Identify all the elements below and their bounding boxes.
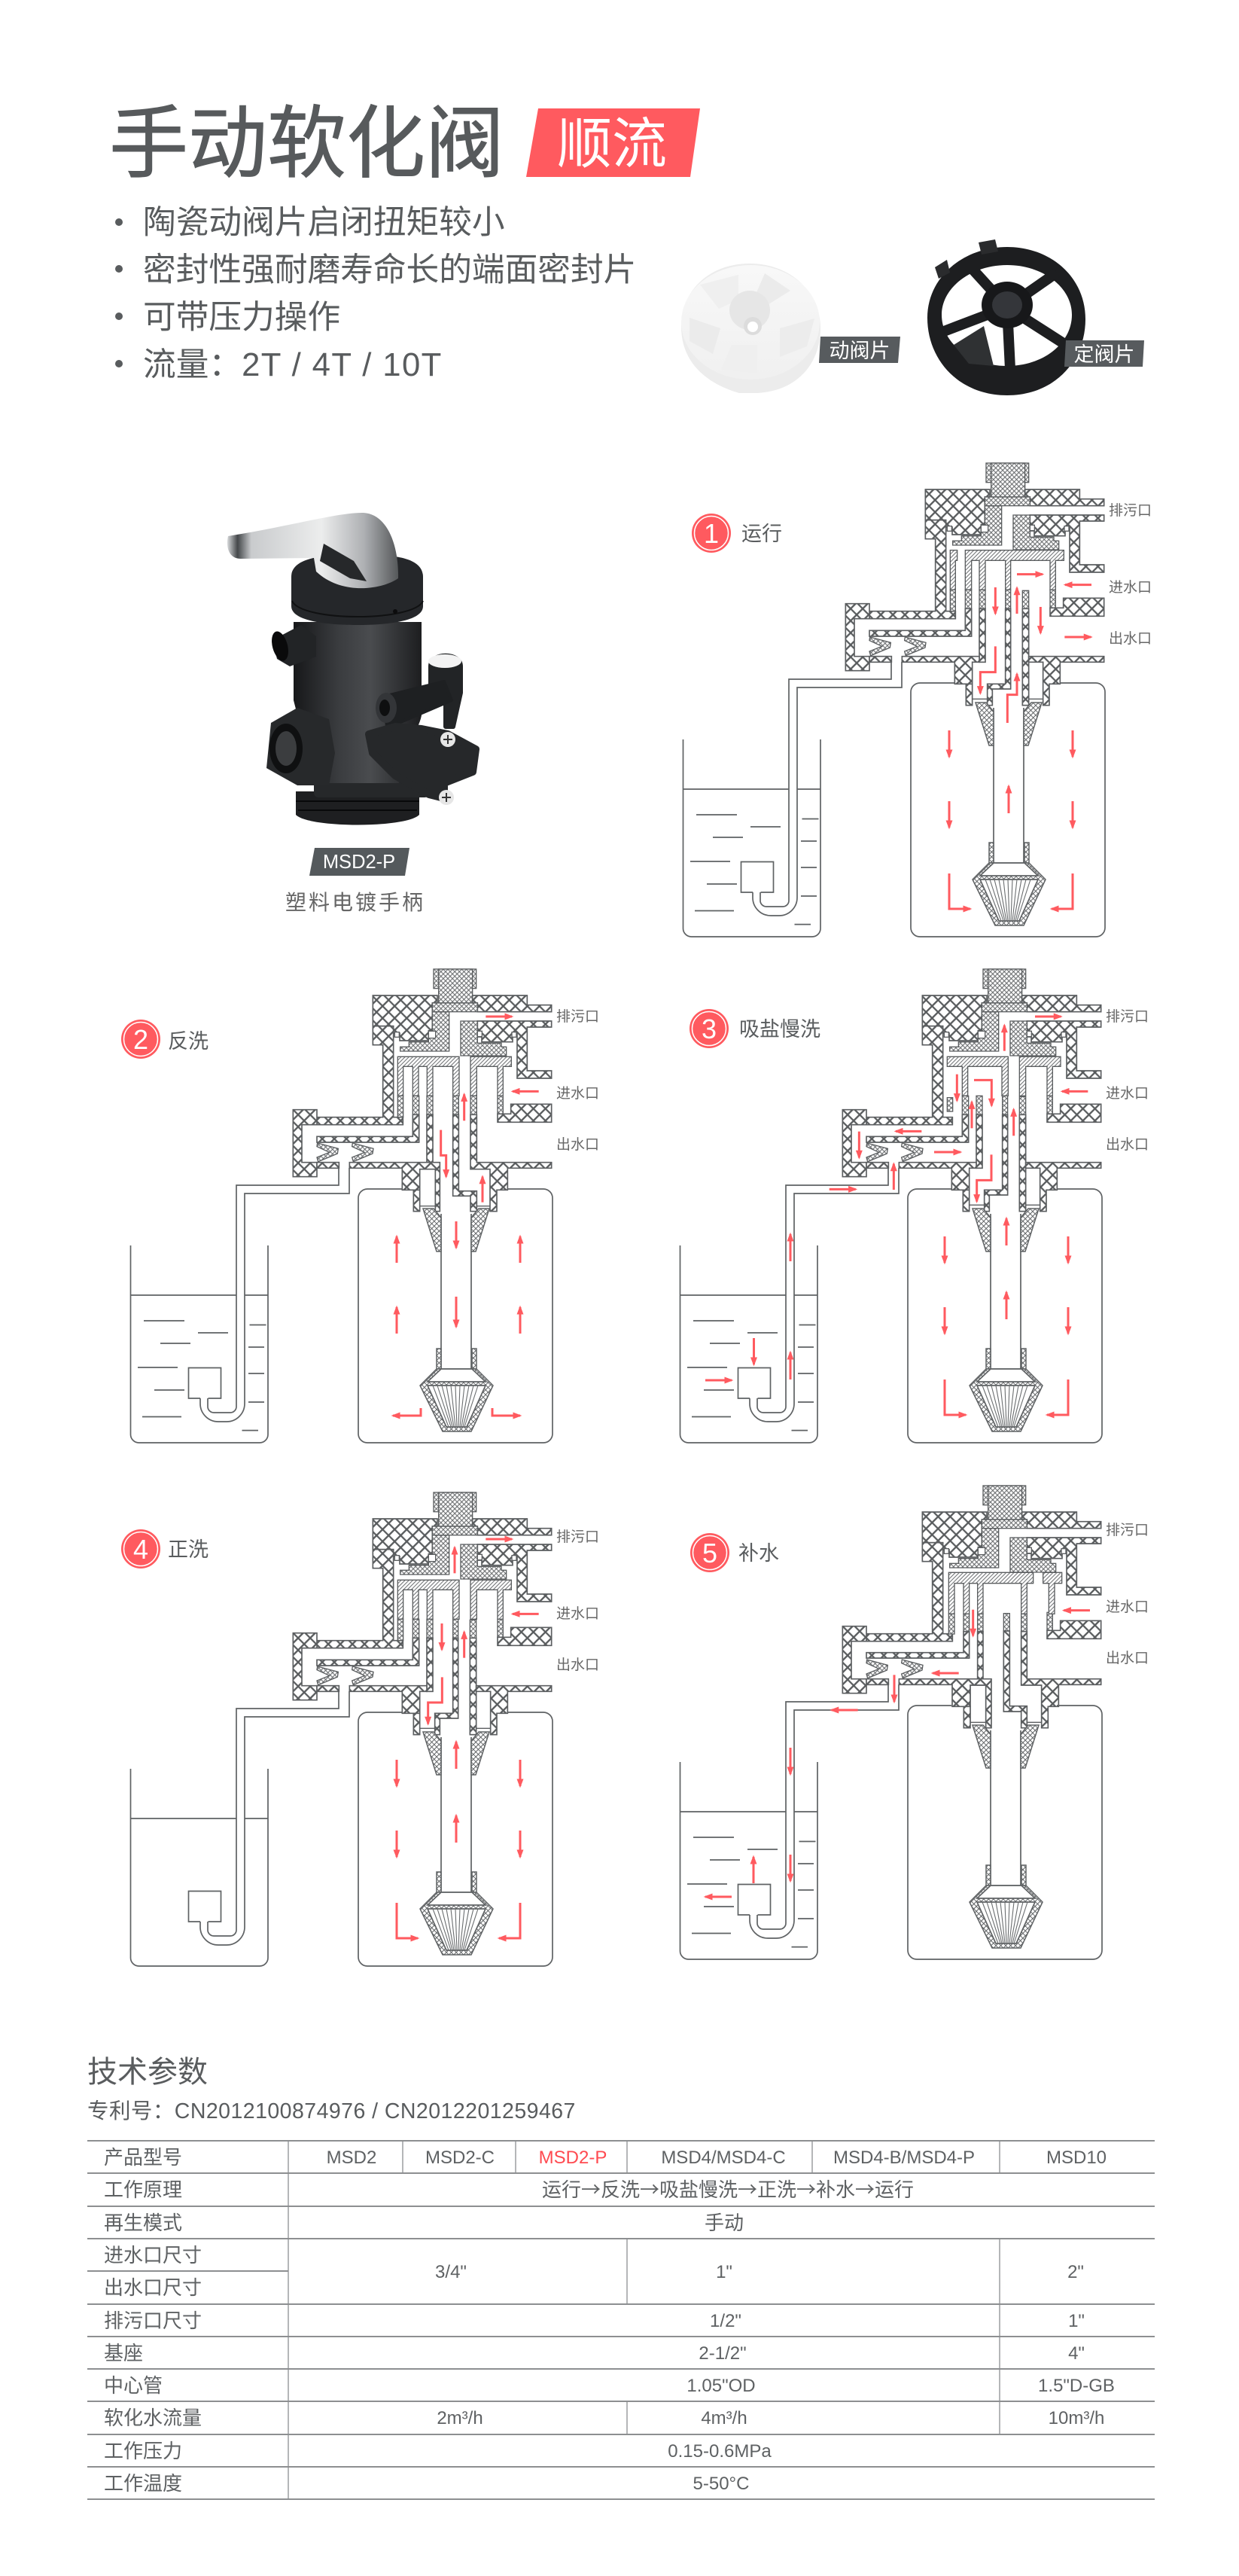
tank and bucket 1 <box>683 662 1105 937</box>
row: pressure: 0.15-0.6MPa <box>668 2441 772 2462</box>
diagram 3: 吸盐慢洗 <box>680 969 1149 1443</box>
step badge 5: 5 <box>702 1538 717 1568</box>
tank and bucket 2 <box>131 1168 553 1443</box>
row: temperature <box>104 2472 749 2495</box>
row: flow: 4m³/h <box>701 2408 747 2428</box>
flow arrows 4 <box>397 1539 539 1938</box>
table grid <box>87 2141 1155 2499</box>
row: base: 4" <box>1068 2343 1085 2364</box>
row: principle <box>104 2175 914 2203</box>
row: center tube <box>104 2374 1115 2397</box>
heading: technical parameters: 技术参数 <box>87 2056 208 2089</box>
port labels 1: 进水口 <box>1109 579 1152 596</box>
row: principle: 工作原理 <box>104 2178 182 2201</box>
row: temperature: 工作温度 <box>104 2472 182 2495</box>
row: model: MSD2-P <box>539 2148 607 2168</box>
row: drain size: 1/2" <box>710 2311 741 2331</box>
row: center tube: 中心管 <box>104 2374 163 2397</box>
port labels 3: 排污口 <box>1106 1008 1149 1025</box>
feature list: 密封性强耐磨寿命长的端面密封片 <box>143 252 636 288</box>
port labels 1: 出水口 <box>1109 630 1152 647</box>
step badge 4: 4 <box>133 1534 148 1565</box>
step badge 4: 正洗 <box>168 1538 209 1561</box>
port labels 2: 出水口 <box>556 1136 599 1153</box>
diagram 5: 补水 <box>680 1486 1149 1959</box>
step badge 2: 反洗 <box>168 1030 209 1053</box>
feature list: 可带压力操作 <box>143 299 340 336</box>
port labels 5: 进水口 <box>1106 1599 1149 1615</box>
row: inlet and outlet size: 进水口尺寸 <box>104 2244 202 2267</box>
flow arrows 5 <box>705 1610 1090 1897</box>
row: flow <box>104 2407 1104 2429</box>
row: model: MSD2-C <box>425 2148 495 2168</box>
row: regeneration mode: 手动 <box>705 2212 744 2234</box>
spec table <box>87 2141 1155 2499</box>
step badge 1: 运行 <box>741 523 782 545</box>
tag: fixed disc <box>1064 340 1144 367</box>
step badge 3: 3 <box>702 1014 717 1044</box>
port labels 2: 排污口 <box>556 1008 599 1025</box>
diagram 4: 正洗 <box>121 1492 599 1966</box>
valve schematic 2 <box>293 969 552 1212</box>
step badge 2: 2 <box>133 1024 148 1055</box>
row: principle: 运行→反洗→吸盐慢洗→正洗→补水→运行 <box>542 2175 914 2203</box>
port labels 5: 出水口 <box>1106 1650 1149 1666</box>
row: model: MSD2 <box>327 2148 376 2168</box>
row: inlet and outlet size <box>104 2244 1084 2299</box>
step badge 3 <box>690 1009 820 1048</box>
tag: 顺流 <box>526 108 700 177</box>
diagram 1: 运行 <box>683 463 1152 937</box>
port labels 5 <box>1106 1522 1149 1666</box>
step badge 3: 吸盐慢洗 <box>739 1018 820 1041</box>
tank and bucket 4 <box>131 1691 553 1966</box>
row: temperature: 5-50°C <box>693 2474 749 2494</box>
row: model: MSD4/MSD4-C <box>661 2148 786 2168</box>
row: center tube: 1.05"OD <box>686 2376 756 2396</box>
port labels 4 <box>556 1529 599 1673</box>
row: model: MSD10 <box>1046 2148 1107 2168</box>
port labels 3 <box>1106 1008 1149 1153</box>
feature list <box>115 204 636 383</box>
row: drain size: 1" <box>1068 2311 1085 2331</box>
valve schematic 1 <box>845 463 1104 706</box>
port labels 2 <box>556 1008 599 1153</box>
row: base: 2-1/2" <box>699 2343 747 2364</box>
port labels 1: 排污口 <box>1109 502 1152 519</box>
row: regeneration mode: 再生模式 <box>104 2212 182 2234</box>
port labels 1 <box>1109 502 1152 647</box>
diagram 2: 反洗 <box>121 969 599 1443</box>
port labels 3: 进水口 <box>1106 1085 1149 1102</box>
port labels 2: 进水口 <box>556 1085 599 1102</box>
photo: fixed black disc <box>927 239 1085 395</box>
tag: moving disc <box>819 337 900 363</box>
photo: moving ceramic disc <box>681 264 820 393</box>
valve schematic 4 <box>293 1492 552 1735</box>
step badge 1: 1 <box>704 518 719 549</box>
row: flow: 10m³/h <box>1049 2408 1104 2428</box>
step badge 1 <box>692 514 782 553</box>
model badge <box>309 848 409 876</box>
tag: moving disc: 动阀片 <box>830 340 890 362</box>
row: drain size <box>104 2309 1085 2332</box>
row: regeneration mode <box>104 2212 744 2234</box>
row: inlet and outlet size: 3/4" <box>435 2262 467 2282</box>
row: pressure <box>104 2440 772 2462</box>
feature list: 流量：2T / 4T / 10T <box>143 346 443 383</box>
row: model <box>104 2146 1107 2169</box>
tag: 顺流: 顺流 <box>557 114 667 175</box>
row: inlet and outlet size: 出水口尺寸 <box>104 2276 202 2299</box>
row: inlet and outlet size: 1" <box>716 2262 732 2282</box>
port labels 4: 进水口 <box>556 1605 599 1622</box>
row: model: MSD4-B/MSD4-P <box>833 2148 975 2168</box>
flow arrows 3 <box>705 1017 1088 1415</box>
port labels 5: 排污口 <box>1106 1522 1149 1538</box>
flow arrows 2 <box>393 1017 539 1416</box>
row: flow: 软化水流量 <box>104 2407 202 2429</box>
row: drain size: 排污口尺寸 <box>104 2309 202 2332</box>
port labels 3: 出水口 <box>1106 1136 1149 1153</box>
row: inlet and outlet size: 2" <box>1067 2262 1084 2282</box>
tag: fixed disc: 定阀片 <box>1073 343 1135 366</box>
row: base <box>104 2342 1085 2364</box>
photo: MSD2-P valve <box>227 513 476 825</box>
patent numbers: 专利号：CN2012100874976 / CN2012201259467 <box>87 2099 576 2123</box>
step badge 5: 补水 <box>738 1542 779 1565</box>
tank and bucket 5 <box>680 1684 1102 1959</box>
port labels 4: 排污口 <box>556 1529 599 1545</box>
step badge 5 <box>690 1533 779 1572</box>
port labels 4: 出水口 <box>556 1657 599 1673</box>
step badge 2 <box>121 1020 209 1059</box>
step badge 4 <box>121 1529 209 1568</box>
valve schematic 5 <box>842 1486 1101 1728</box>
row: pressure: 工作压力 <box>104 2440 182 2462</box>
tank and bucket 3 <box>680 1168 1102 1443</box>
row: model: 产品型号 <box>104 2146 182 2169</box>
row: flow: 2m³/h <box>437 2408 483 2428</box>
caption: 塑料电镀手柄 <box>285 891 425 914</box>
feature list: 陶瓷动阀片启闭扭矩较小 <box>143 204 505 241</box>
row: base: 基座 <box>104 2342 143 2364</box>
title: 手动软化阀 <box>109 100 504 188</box>
model badge: MSD2-P <box>323 852 395 873</box>
flow arrows 1 <box>949 575 1091 909</box>
valve schematic 3 <box>842 969 1101 1212</box>
row: center tube: 1.5"D-GB <box>1038 2376 1115 2396</box>
